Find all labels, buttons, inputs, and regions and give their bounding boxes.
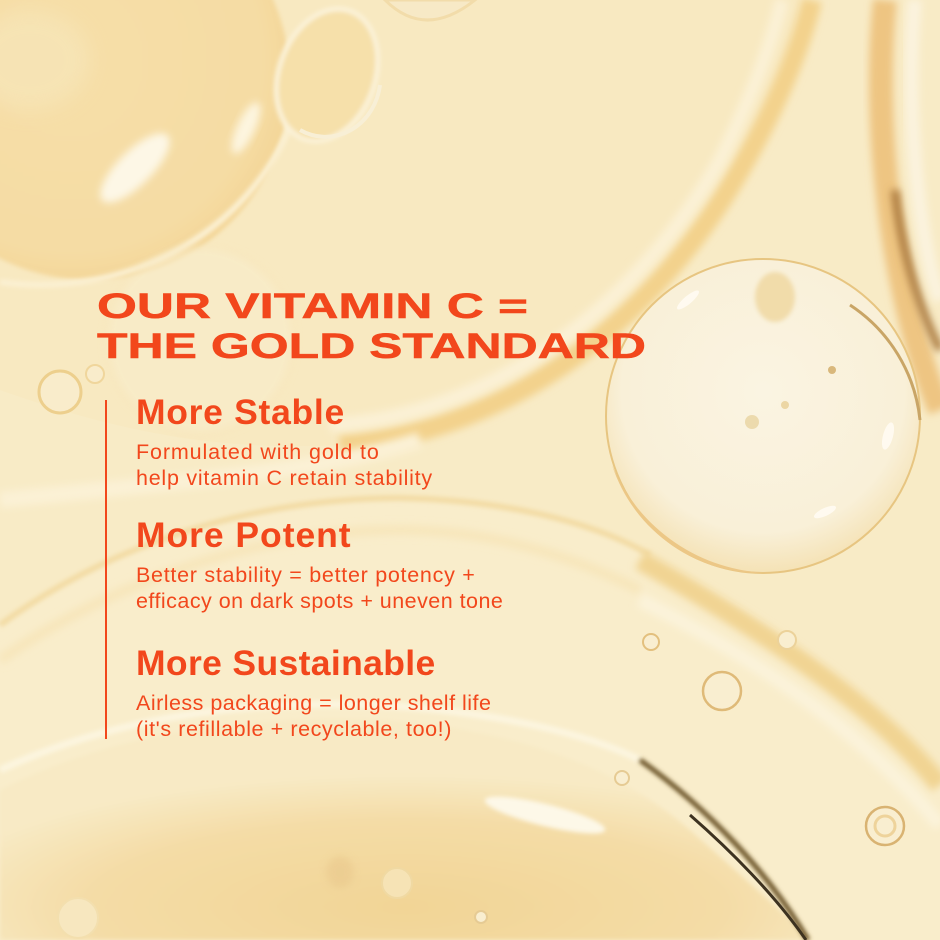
- clear sphere bubble: [606, 259, 920, 573]
- lower pool bubble: [0, 704, 812, 940]
- top-left bubble: [0, 0, 300, 285]
- text: more potent description: Better stability = better potency +: [136, 563, 476, 587]
- heading: more sustainable: More Sustainable: [136, 643, 436, 683]
- text: more potent description: efficacy on dark spots + uneven tone: [136, 589, 503, 613]
- section: more potent: [136, 515, 503, 613]
- text: more stable description: help vitamin C retain stability: [136, 466, 433, 490]
- title: [97, 287, 646, 366]
- title: OUR VITAMIN C =: [97, 287, 528, 326]
- text: more sustainable description: (it's refillable + recyclable, too!): [136, 717, 452, 741]
- large diagonal ring: [0, 0, 812, 500]
- heading: more stable: More Stable: [136, 392, 345, 432]
- text: more stable description: Formulated with gold to: [136, 440, 380, 464]
- heading: more potent: More Potent: [136, 515, 352, 555]
- text: more potent description: [136, 563, 503, 613]
- section: more stable: [136, 392, 433, 490]
- title: THE GOLD STANDARD: [97, 327, 646, 366]
- vertical divider line: [105, 400, 107, 739]
- mid-left faint bubble: [39, 247, 293, 433]
- large lower-centre ring: [0, 498, 940, 940]
- small droplets: [58, 631, 904, 938]
- text: more sustainable description: Airless packaging = longer shelf life: [136, 691, 491, 715]
- top-right edge ring: [881, 0, 940, 410]
- section: more sustainable: [136, 643, 491, 741]
- text: more stable description: [136, 440, 433, 490]
- top small bubble: [259, 0, 475, 155]
- text: more sustainable description: [136, 691, 491, 741]
